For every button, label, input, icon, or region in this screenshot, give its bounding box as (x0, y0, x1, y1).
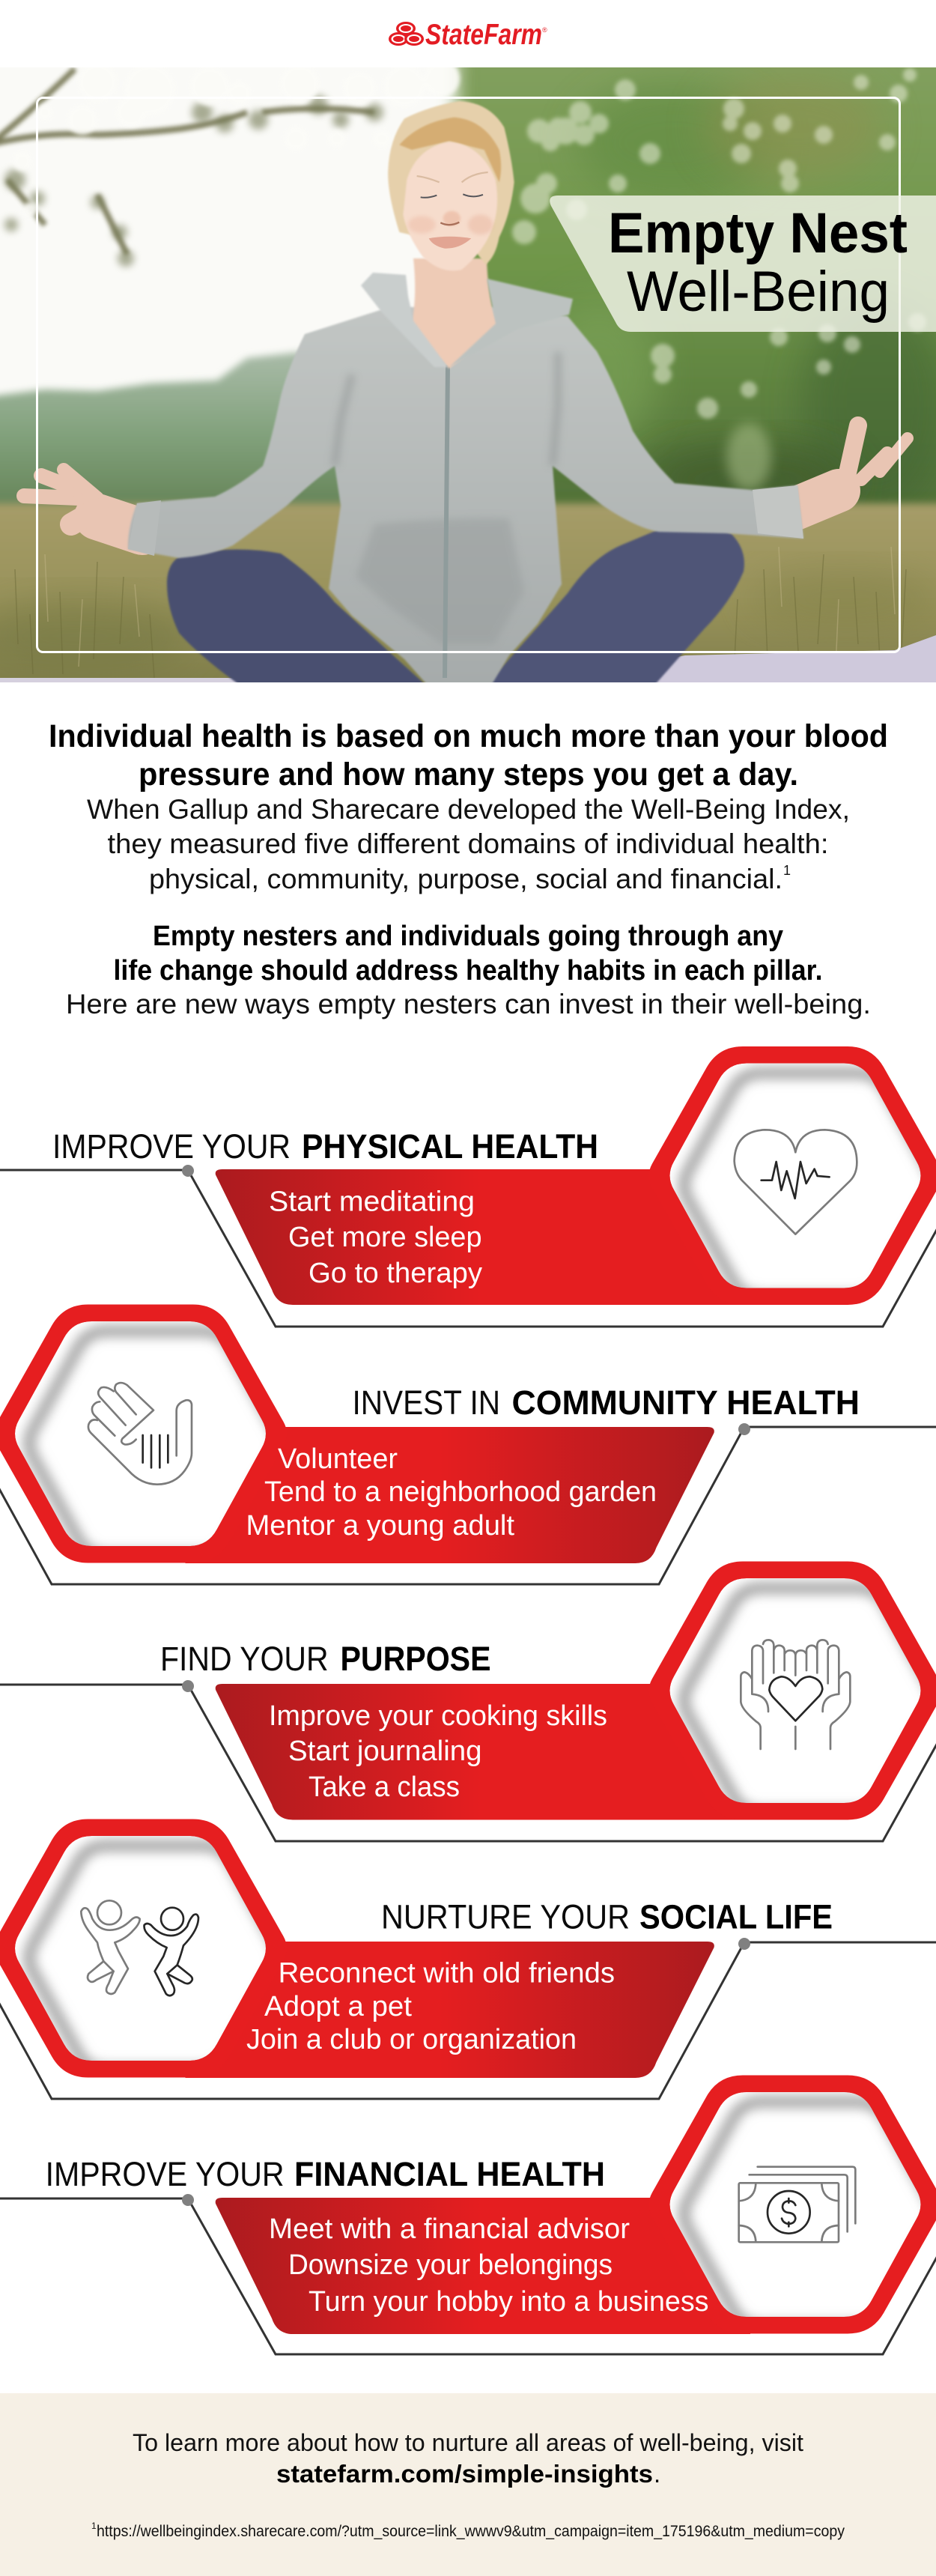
icon: hands holding heart (741, 1640, 850, 1749)
intro text block: When Gallup and Sharecare developed the Well-Being Index, (87, 794, 850, 825)
icon: two people jumping (81, 1900, 198, 1995)
list: Tend to a neighborhood garden (264, 1476, 657, 1508)
list (269, 1187, 482, 1289)
white frame on photo (37, 97, 900, 652)
red band and hexagon (216, 1561, 936, 1820)
connector line (0, 1942, 936, 2099)
connector dot (182, 2194, 194, 2206)
red band and hexagon (216, 1046, 936, 1305)
panel: physical health (0, 1046, 936, 1327)
tree branches and bokeh top-left (0, 61, 460, 267)
list: Mentor a young adult (246, 1510, 514, 1542)
woman figure (24, 101, 908, 693)
list (246, 1443, 657, 1542)
connector line (0, 2198, 936, 2354)
footer call to action: statefarm.com/simple-insights (276, 2460, 653, 2488)
neck (410, 258, 500, 369)
heading: INVEST IN (352, 1384, 500, 1422)
head (388, 101, 514, 270)
list (246, 1958, 615, 2055)
intro text block: pressure and how many steps you get a day. (139, 757, 798, 793)
cuffs (128, 500, 161, 556)
title panel: Empty Nest Well-Being (550, 196, 936, 332)
list: Downsize your belongings (288, 2249, 613, 2281)
distant trees left (0, 348, 341, 509)
pants (166, 530, 746, 682)
heading (381, 1898, 833, 1936)
icon: stack of money (739, 2167, 855, 2242)
red band and hexagon (0, 1819, 714, 2078)
list: Reconnect with old friends (279, 1958, 615, 1989)
list: Take a class (309, 1772, 460, 1803)
zip (445, 365, 448, 678)
list: Volunteer (278, 1443, 398, 1475)
panel: purpose (0, 1561, 936, 1841)
connector line (0, 1685, 936, 1841)
heading: PHYSICAL HEALTH (302, 1127, 598, 1166)
panel: financial health (0, 2075, 936, 2354)
intro text block: Empty nesters and individuals going through any (153, 921, 783, 952)
list: Start journaling (288, 1736, 482, 1767)
heading (352, 1384, 860, 1422)
red band and hexagon (216, 2075, 936, 2334)
connector dot (182, 1680, 194, 1692)
grass (0, 503, 936, 698)
hero photo: woman meditating outdoors (0, 45, 936, 698)
icon: helping hand (88, 1383, 192, 1485)
logo: State Farm: ® (542, 26, 547, 34)
intro text block: 1 (783, 863, 791, 878)
footer call to action: To learn more about how to nurture all areas of well-being, visit (133, 2429, 803, 2456)
heading: IMPROVE YOUR (52, 1127, 291, 1166)
logo: State Farm (389, 19, 547, 51)
list: Go to therapy (309, 1258, 482, 1289)
list: Start meditating (269, 1187, 475, 1218)
heading: IMPROVE YOUR (46, 2155, 285, 2193)
list: Get more sleep (288, 1222, 482, 1253)
heading: FINANCIAL HEALTH (294, 2155, 605, 2193)
intro text block: Individual health is based on much more than your blood (49, 718, 888, 754)
heading: SOCIAL LIFE (639, 1898, 833, 1936)
list (269, 2213, 708, 2318)
hands (24, 425, 908, 532)
panel: social life (0, 1819, 936, 2099)
list: Adopt a pet (264, 1991, 412, 2022)
list (269, 1700, 607, 1803)
heading (46, 2155, 605, 2193)
footer call to action (133, 2429, 803, 2488)
connector dot (738, 1938, 750, 1950)
heading (160, 1640, 491, 1678)
heading: FIND YOUR (160, 1640, 329, 1678)
connector line (0, 1427, 936, 1584)
heading: NURTURE YOUR (381, 1898, 630, 1936)
intro text block (49, 718, 888, 1019)
mat (636, 635, 936, 682)
intro text block: they measured five different domains of individual health: (108, 828, 828, 859)
red band and hexagon (0, 1305, 714, 1563)
connector dot (738, 1423, 750, 1435)
footer panel (0, 2393, 936, 2576)
panel: community health (0, 1305, 936, 1584)
intro text block: physical, community, purpose, social and financial. (149, 864, 782, 894)
footnote: 1 (91, 2521, 97, 2531)
footer call to action: . (654, 2460, 660, 2488)
heading (52, 1127, 598, 1166)
intro text block: Here are new ways empty nesters can invest in their well-being. (66, 989, 871, 1019)
hood (361, 273, 448, 367)
icon: heart with pulse (735, 1130, 857, 1234)
title panel: Empty Nest Well-Being: Well-Being (627, 260, 890, 324)
heading: COMMUNITY HEALTH (512, 1384, 860, 1422)
footnote: https://wellbeingindex.sharecare.com/?utm_source=link_wwwv9&utm_campaign=item_175196&utm_medium=copy (97, 2523, 845, 2540)
list: Join a club or organization (246, 2024, 577, 2055)
connector dot (182, 1165, 194, 1177)
foliage background right (457, 45, 936, 539)
title panel: Empty Nest Well-Being: Empty Nest (608, 201, 908, 265)
intro text block: life change should address healthy habits in each pillar. (114, 955, 822, 987)
hoodie body and arms (128, 307, 803, 693)
hoodie shading (335, 352, 558, 644)
list: Meet with a financial advisor (269, 2213, 630, 2245)
logo: State Farm: StateFarm (425, 19, 542, 51)
heading: PURPOSE (340, 1640, 491, 1678)
list: Turn your hobby into a business (309, 2286, 708, 2318)
list: Improve your cooking skills (269, 1700, 607, 1732)
connector line (0, 1170, 936, 1327)
